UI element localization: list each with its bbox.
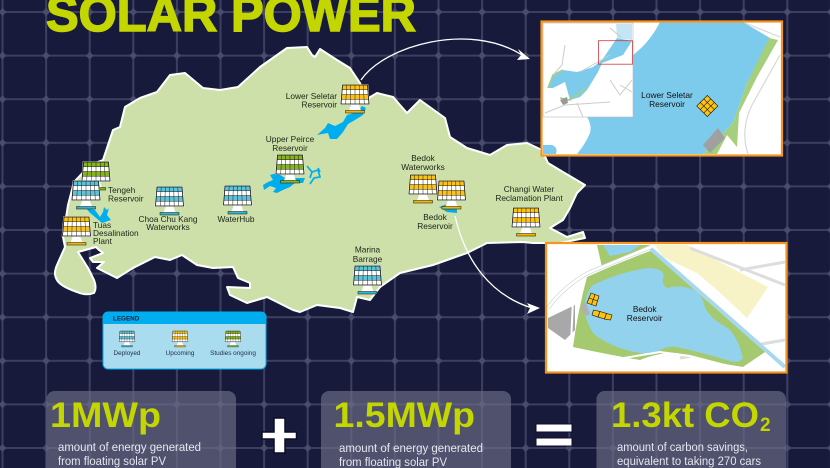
plus sign: [262, 418, 296, 453]
solar panel: Choa Chu Kang: [156, 187, 184, 215]
legend item: deployed: [113, 331, 141, 357]
inset map: Bedok Reservoir: [546, 243, 786, 372]
inset label: Bedok: [633, 304, 657, 314]
label: Lower Seletar Reservoir: Lower Seletar: [286, 91, 337, 101]
inset label: Reservoir: [649, 99, 685, 109]
stat card: 1.3kt CO2: 2: [760, 415, 771, 436]
legend item: upcoming: Upcoming: [166, 350, 195, 357]
solar panel: Marina Barrage: [354, 266, 382, 294]
label: Upper Peirce Reservoir: Upper Peirce: [266, 134, 315, 144]
inset locator map: [543, 23, 633, 117]
stat card: 1.3kt CO2: [596, 391, 786, 468]
stat card: 1MWp: [46, 391, 236, 468]
reservoir: Upper Peirce: [263, 166, 320, 193]
arrow: Lower Seletar to inset: [361, 39, 530, 80]
solar panel: Lower Seletar: [341, 85, 369, 113]
stat card: 1.5MWp: [321, 391, 511, 468]
label: Bedok Reservoir: Reservoir: [417, 221, 453, 231]
stat card: 1.3kt CO2: 1.3kt CO: [611, 396, 759, 435]
solar panel: Bedok Waterworks: [409, 175, 437, 203]
label: Marina Barrage: Marina: [355, 244, 381, 254]
label: Tuas Desalination Plant: Desalination: [93, 228, 139, 238]
inset border: [546, 243, 786, 372]
stat card: 1MWp: amount of energy generated: [58, 440, 201, 454]
label: Tengeh Reservoir: Reservoir: [108, 194, 144, 204]
solar panel: Tuas upcoming: [62, 217, 90, 245]
solar panel: Changi: [512, 208, 540, 236]
floating panels: [587, 293, 612, 320]
label: Tuas Desalination Plant: Plant: [93, 236, 113, 246]
label: Bedok Waterworks: Bedok: [411, 153, 436, 163]
label: Upper Peirce Reservoir: Reservoir: [272, 143, 308, 153]
locator rectangle: [598, 41, 632, 64]
reservoir: Lower Seletar: [317, 106, 366, 139]
stat card: 1.5MWp: 1.5MWp: [334, 396, 475, 435]
legend item: studies ongoing: [210, 331, 256, 357]
map: Singapore island: [55, 47, 585, 312]
legend item: upcoming: [166, 331, 195, 357]
stat card: 1.5MWp: amount of energy generated: [339, 441, 483, 455]
label: WaterHub: WaterHub: [217, 214, 255, 224]
label: Changi Water Reclamation Plant: Changi Water: [504, 184, 554, 194]
label: Bedok Waterworks: Waterworks: [401, 162, 445, 172]
inset map: Lower Seletar Reservoir: [542, 22, 782, 156]
stat card: 1MWp: from floating solar PV: [58, 454, 167, 468]
solar panel: Upper Peirce: [276, 155, 304, 183]
inset label: Reservoir: [627, 313, 663, 323]
legend panel: [103, 312, 266, 369]
legend item: studies ongoing: Studies ongoing: [210, 350, 256, 357]
inset label: Lower Seletar: [641, 90, 693, 100]
stat card: 1.3kt CO2: amount of carbon savings,: [617, 440, 748, 454]
legend item: deployed: Deployed: [113, 350, 141, 357]
label: Choa Chu Kang Waterworks: Waterworks: [146, 222, 190, 232]
inset border: [542, 22, 782, 156]
label: Choa Chu Kang Waterworks: Choa Chu Kang: [138, 214, 198, 224]
solar panel: Tengeh studies: [82, 162, 110, 190]
label: Lower Seletar Reservoir: Reservoir: [301, 100, 337, 110]
equals sign: [536, 424, 572, 446]
arrow: Bedok to inset: [455, 216, 540, 314]
floating panels: [697, 95, 718, 117]
label: Marina Barrage: Barrage: [353, 254, 383, 264]
label: Tengeh Reservoir: Tengeh: [108, 185, 136, 195]
solar panel: WaterHub: [224, 186, 252, 214]
solar panel: Tengeh deployed: [72, 181, 100, 209]
reservoir: Bedok: [439, 204, 457, 213]
label: Tuas Desalination Plant: Tuas: [93, 220, 111, 230]
legend heading: LEGEND: [113, 316, 140, 322]
reservoir: Tengeh: [86, 207, 111, 223]
stat card: 1MWp: 1MWp: [50, 396, 161, 435]
label: Changi Water Reclamation Plant: Reclamation Plant: [495, 193, 563, 203]
stat card: 1.3kt CO2: equivalent to taking 270 cars: [617, 454, 761, 468]
label: Bedok Reservoir: Bedok: [423, 212, 448, 222]
solar panel: Bedok Reservoir: [438, 181, 466, 209]
